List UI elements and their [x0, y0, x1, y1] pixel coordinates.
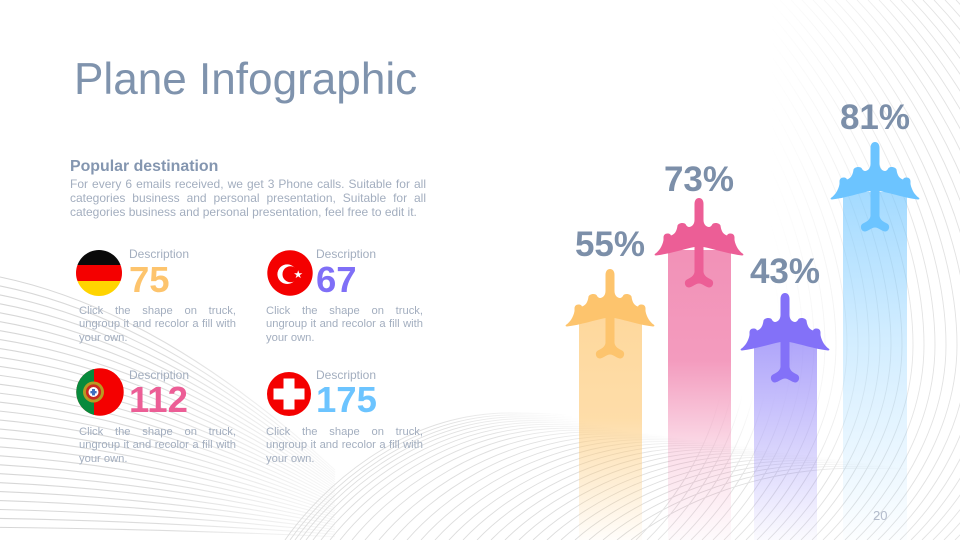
value: 67: [316, 259, 357, 300]
paragraph: categories business and personal presentation, Suitable for all: [70, 191, 426, 205]
label: 73%: 73%: [664, 160, 734, 199]
description: Description: [129, 247, 189, 261]
body text: your own.: [79, 332, 128, 344]
icon: Turkey flag: [267, 250, 313, 296]
body text: ungroup it and recolor a fill with: [79, 318, 236, 330]
panel: Germany stat: [76, 247, 236, 344]
bar: pink 73%: [655, 198, 743, 540]
bar: yellow 55%: [566, 269, 654, 540]
paragraph: categories business and personal presentation, feel free to edit it.: [70, 205, 417, 219]
label: 55%: 55%: [575, 225, 645, 264]
paragraph: [70, 177, 426, 219]
page number: 20: [873, 508, 887, 523]
panel: Switzerland stat: [266, 368, 423, 465]
bar: purple 43%: [741, 293, 829, 540]
heading: Popular destination: [70, 158, 218, 175]
bar: blue 81%: [831, 142, 919, 540]
icon: Switzerland flag: [267, 372, 311, 416]
body text: [266, 305, 423, 344]
description: Description: [316, 368, 376, 382]
panel: Portugal stat: [76, 368, 236, 465]
paragraph: For every 6 emails received, we get 3 Phone calls. Suitable for all: [70, 177, 426, 191]
description: Description: [316, 247, 376, 261]
body text: your own.: [266, 332, 315, 344]
text block: popular destination: [70, 158, 426, 219]
body text: your own.: [79, 453, 128, 465]
icon: Germany flag: [76, 250, 122, 296]
body text: Click the shape on truck,: [266, 305, 423, 317]
value: 75: [129, 259, 170, 300]
body text: Click the shape on truck,: [266, 426, 423, 438]
body text: ungroup it and recolor a fill with: [266, 439, 423, 451]
label: 43%: 43%: [750, 252, 820, 291]
label: 81%: 81%: [840, 98, 910, 137]
value: 175: [316, 379, 377, 420]
body text: ungroup it and recolor a fill with: [79, 439, 236, 451]
body text: [266, 426, 423, 465]
body text: Click the shape on truck,: [79, 426, 236, 438]
body text: [79, 426, 236, 465]
body text: Click the shape on truck,: [79, 305, 236, 317]
title: Plane Infographic: [74, 55, 417, 104]
panel: Turkey stat: [266, 247, 423, 344]
icon: Portugal flag: [76, 368, 124, 416]
body text: [79, 305, 236, 344]
description: Description: [129, 368, 189, 382]
body text: your own.: [266, 453, 315, 465]
body text: ungroup it and recolor a fill with: [266, 318, 423, 330]
value: 112: [129, 379, 188, 420]
